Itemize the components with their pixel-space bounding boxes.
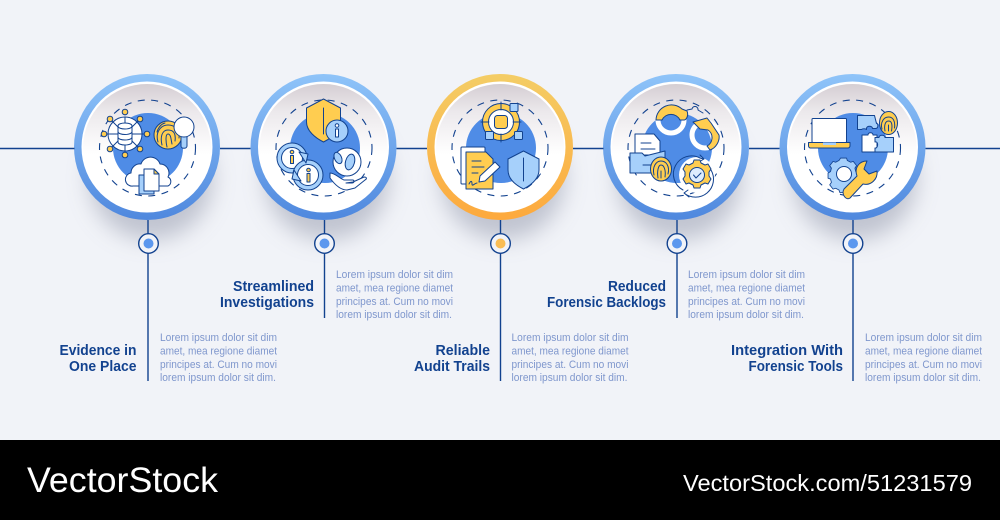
icon: shield (508, 151, 539, 189)
heading: Investigations (220, 295, 314, 311)
icon: fingerprint (650, 157, 672, 181)
text block: lorem ipsum dolor sit dim. (512, 372, 628, 384)
icon: laptop (808, 118, 850, 148)
heading (60, 343, 136, 375)
text block (160, 332, 277, 384)
heading: Integration With (731, 343, 843, 359)
medallion (780, 74, 926, 240)
text block: amet, mea regione diamet (512, 346, 629, 358)
footer: watermark bar (0, 440, 1000, 520)
icon: fingerprint with magnifier (154, 117, 194, 149)
text block: principes at. Cum no movi (512, 359, 628, 371)
heading (220, 279, 314, 311)
heading: Reliable (436, 343, 490, 359)
text block: Lorem ipsum dolor sit dim (688, 269, 805, 281)
heading: Streamlined (233, 279, 314, 295)
heading: Forensic Backlogs (547, 295, 666, 311)
footer: watermark bar: VectorStock (27, 461, 219, 500)
icon: signed document and pencil (461, 147, 500, 189)
panel: reliable audit trails (414, 74, 629, 384)
heading (414, 343, 490, 375)
timeline axis (0, 148, 1000, 150)
panel: streamlined investigations (220, 74, 453, 321)
connector and marker (843, 220, 863, 381)
connector and marker (667, 220, 687, 318)
medallion (250, 74, 396, 240)
icon: database network (101, 109, 150, 158)
heading (547, 279, 666, 311)
heading: Reduced (608, 279, 666, 295)
text block: lorem ipsum dolor sit dim. (336, 309, 452, 321)
text block: lorem ipsum dolor sit dim. (160, 372, 276, 384)
text block: amet, mea regione diamet (865, 346, 982, 358)
text block: principes at. Cum no movi (160, 359, 277, 371)
heading (731, 343, 843, 375)
text block: Lorem ipsum dolor sit dim (160, 332, 277, 344)
text block: Lorem ipsum dolor sit dim (512, 332, 629, 344)
panel: integration with forensic tools (731, 74, 982, 384)
medallion (74, 74, 220, 240)
icon: gear with check (673, 155, 715, 197)
medallion (427, 74, 573, 240)
icon: gear and wrench (828, 158, 877, 199)
icon: handcuffs (656, 105, 719, 150)
connector and marker (139, 220, 158, 381)
connector and marker (491, 220, 510, 381)
icon: folder with document (630, 134, 665, 173)
text block: amet, mea regione diamet (688, 282, 805, 294)
icon: fingerprint (880, 112, 898, 134)
panel: evidence in one place (60, 74, 277, 384)
icon: cloud documents (125, 157, 171, 194)
text block: amet, mea regione diamet (336, 282, 453, 294)
text block: lorem ipsum dolor sit dim. (865, 372, 981, 384)
icon: puzzle pieces (858, 116, 894, 152)
text block: principes at. Cum no movi (688, 296, 805, 308)
text block: Lorem ipsum dolor sit dim (865, 332, 982, 344)
icon: information cycle (277, 143, 323, 190)
icon: shield with info (306, 99, 348, 142)
text block (512, 332, 629, 384)
text block (688, 269, 805, 321)
heading: Forensic Tools (748, 359, 843, 375)
heading: Evidence in (60, 343, 136, 359)
heading: One Place (69, 359, 136, 375)
text block: Lorem ipsum dolor sit dim (336, 269, 453, 281)
text block: principes at. Cum no movi (865, 359, 982, 371)
icon: target (481, 102, 522, 142)
footer: watermark bar: VectorStock.com/51231579 (683, 470, 972, 496)
text block (336, 269, 453, 321)
text block: principes at. Cum no movi (336, 296, 453, 308)
text block: amet, mea regione diamet (160, 346, 277, 358)
medallion (603, 74, 749, 240)
text block (865, 332, 982, 384)
panel: reduced forensic backlogs (547, 74, 805, 321)
text block: lorem ipsum dolor sit dim. (688, 309, 804, 321)
heading: Audit Trails (414, 359, 490, 375)
icon: footprints in hand (330, 148, 366, 190)
connector and marker (315, 220, 334, 318)
